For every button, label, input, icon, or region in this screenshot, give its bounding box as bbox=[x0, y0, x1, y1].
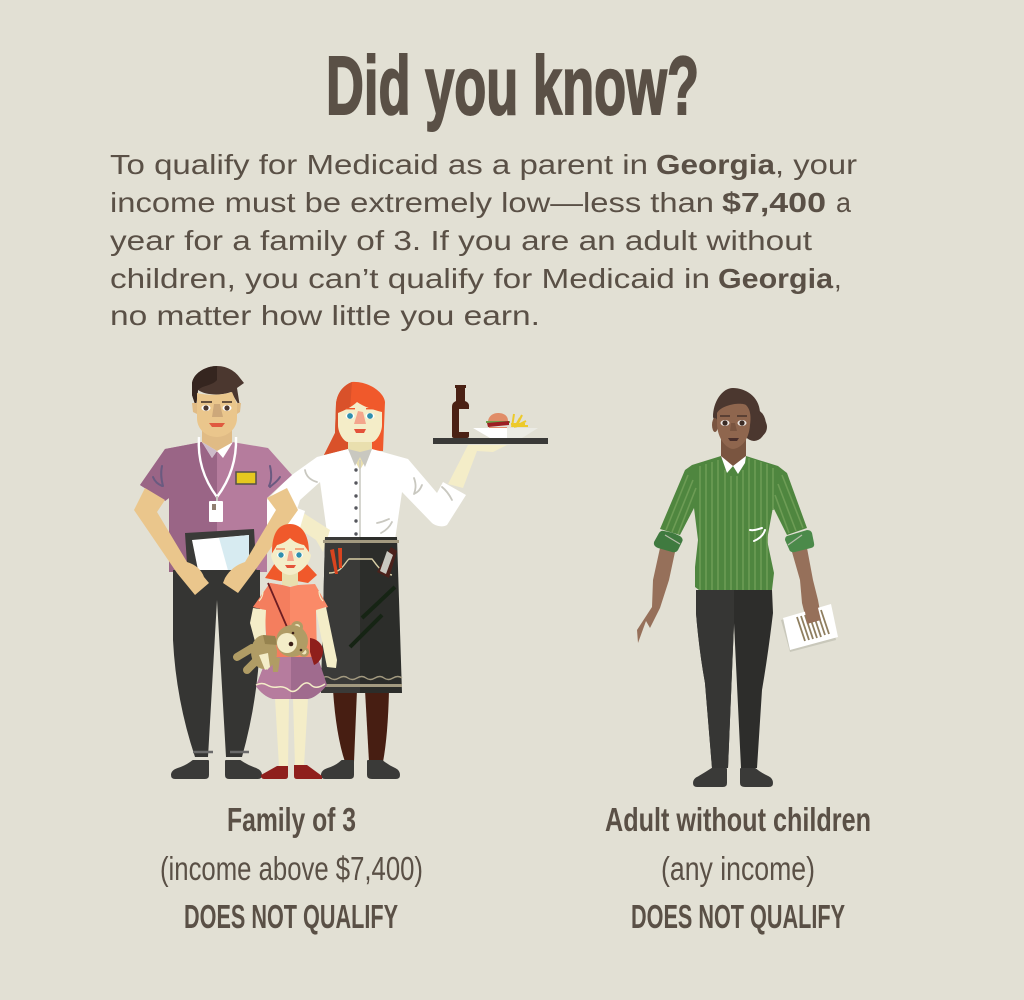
shirt bbox=[140, 442, 292, 572]
face bbox=[197, 392, 237, 437]
name badge bbox=[236, 472, 256, 484]
neck bbox=[721, 435, 746, 466]
hand bbox=[803, 600, 821, 624]
fries bbox=[511, 414, 528, 427]
hair and bun bbox=[713, 388, 767, 441]
shoes bbox=[694, 769, 726, 786]
illustration: adult without children bbox=[637, 388, 838, 786]
neck bbox=[282, 572, 298, 586]
text block: Medicaid explanation: To qualify for Medicaid as a parent in bbox=[110, 149, 648, 180]
teddy bear bbox=[237, 621, 309, 672]
caption: adult without children bbox=[605, 801, 871, 935]
handbag bbox=[310, 638, 323, 665]
tray bbox=[433, 438, 548, 444]
leg left bbox=[333, 690, 357, 762]
text block: Medicaid explanation: income must be extremely low—less than bbox=[110, 187, 714, 218]
figure: waitress mother bbox=[267, 382, 548, 778]
face bbox=[338, 402, 382, 442]
text block: Medicaid explanation: $7,400 bbox=[722, 187, 826, 218]
caption: family of 3 bbox=[160, 801, 423, 935]
hair bbox=[265, 524, 317, 583]
plate bbox=[473, 428, 507, 438]
apron bbox=[321, 537, 402, 693]
neck bbox=[348, 430, 372, 470]
skirt bbox=[256, 655, 327, 699]
caption: family of 3: Family of 3 bbox=[227, 801, 356, 838]
text block: Medicaid explanation: Georgia bbox=[656, 149, 776, 180]
neck bbox=[202, 425, 232, 452]
caption: family of 3: (income above $7,400) bbox=[160, 850, 423, 887]
burger bbox=[488, 413, 508, 421]
text block: Medicaid explanation bbox=[110, 149, 857, 331]
face bbox=[271, 538, 311, 575]
sweater bbox=[660, 456, 807, 593]
pens bbox=[330, 548, 342, 574]
apron stripes bbox=[350, 587, 395, 647]
white collar bbox=[721, 456, 746, 474]
face bbox=[717, 404, 751, 449]
caption: adult without children: DOES NOT QUALIFY bbox=[631, 898, 845, 935]
arms bbox=[637, 548, 675, 643]
shoes bbox=[322, 761, 353, 778]
figure: father bbox=[134, 366, 298, 778]
text block: Medicaid explanation: , bbox=[834, 263, 842, 294]
shoes bbox=[172, 761, 208, 778]
top bbox=[253, 583, 328, 657]
serving arm bbox=[448, 445, 507, 488]
text block: Medicaid explanation: year for a family of 3. If you are an adult without bbox=[110, 225, 812, 256]
bottle bbox=[452, 385, 469, 438]
lanyard and ID card bbox=[199, 437, 236, 522]
trousers bbox=[173, 570, 260, 757]
blouse bbox=[267, 449, 466, 540]
paper held in hand bbox=[781, 604, 838, 652]
arms bbox=[250, 608, 270, 670]
sweater creases bbox=[750, 528, 765, 541]
hair back bbox=[324, 382, 385, 455]
text block: Medicaid explanation: , your bbox=[775, 149, 857, 180]
text block: Medicaid explanation: children, you can’t qualify for Medicaid in bbox=[110, 263, 710, 294]
arms bbox=[134, 488, 209, 595]
hair bbox=[192, 366, 244, 407]
title: Did you know? bbox=[326, 39, 699, 132]
collar bbox=[202, 442, 233, 458]
tablet bbox=[185, 529, 257, 580]
illustration: family of 3 bbox=[134, 366, 548, 779]
serving tray with food bbox=[433, 385, 548, 444]
cuffs bbox=[654, 531, 683, 552]
caption: adult without children: Adult without children bbox=[605, 801, 871, 838]
leg right bbox=[365, 690, 389, 762]
supporting hand bbox=[298, 510, 330, 552]
hand over bear bbox=[259, 653, 270, 670]
figure: daughter with teddy bear bbox=[237, 524, 337, 779]
notepad bbox=[377, 547, 397, 578]
caption: family of 3: DOES NOT QUALIFY bbox=[184, 898, 398, 935]
text block: Medicaid explanation: a bbox=[836, 187, 852, 218]
ear bbox=[712, 418, 718, 432]
legs bbox=[275, 698, 289, 766]
text block: Medicaid explanation: Georgia bbox=[718, 263, 834, 294]
text block: Medicaid explanation: no matter how little you earn. bbox=[110, 300, 540, 331]
caption: adult without children: (any income) bbox=[661, 850, 815, 887]
trousers bbox=[696, 590, 773, 768]
red shoes bbox=[261, 766, 288, 779]
